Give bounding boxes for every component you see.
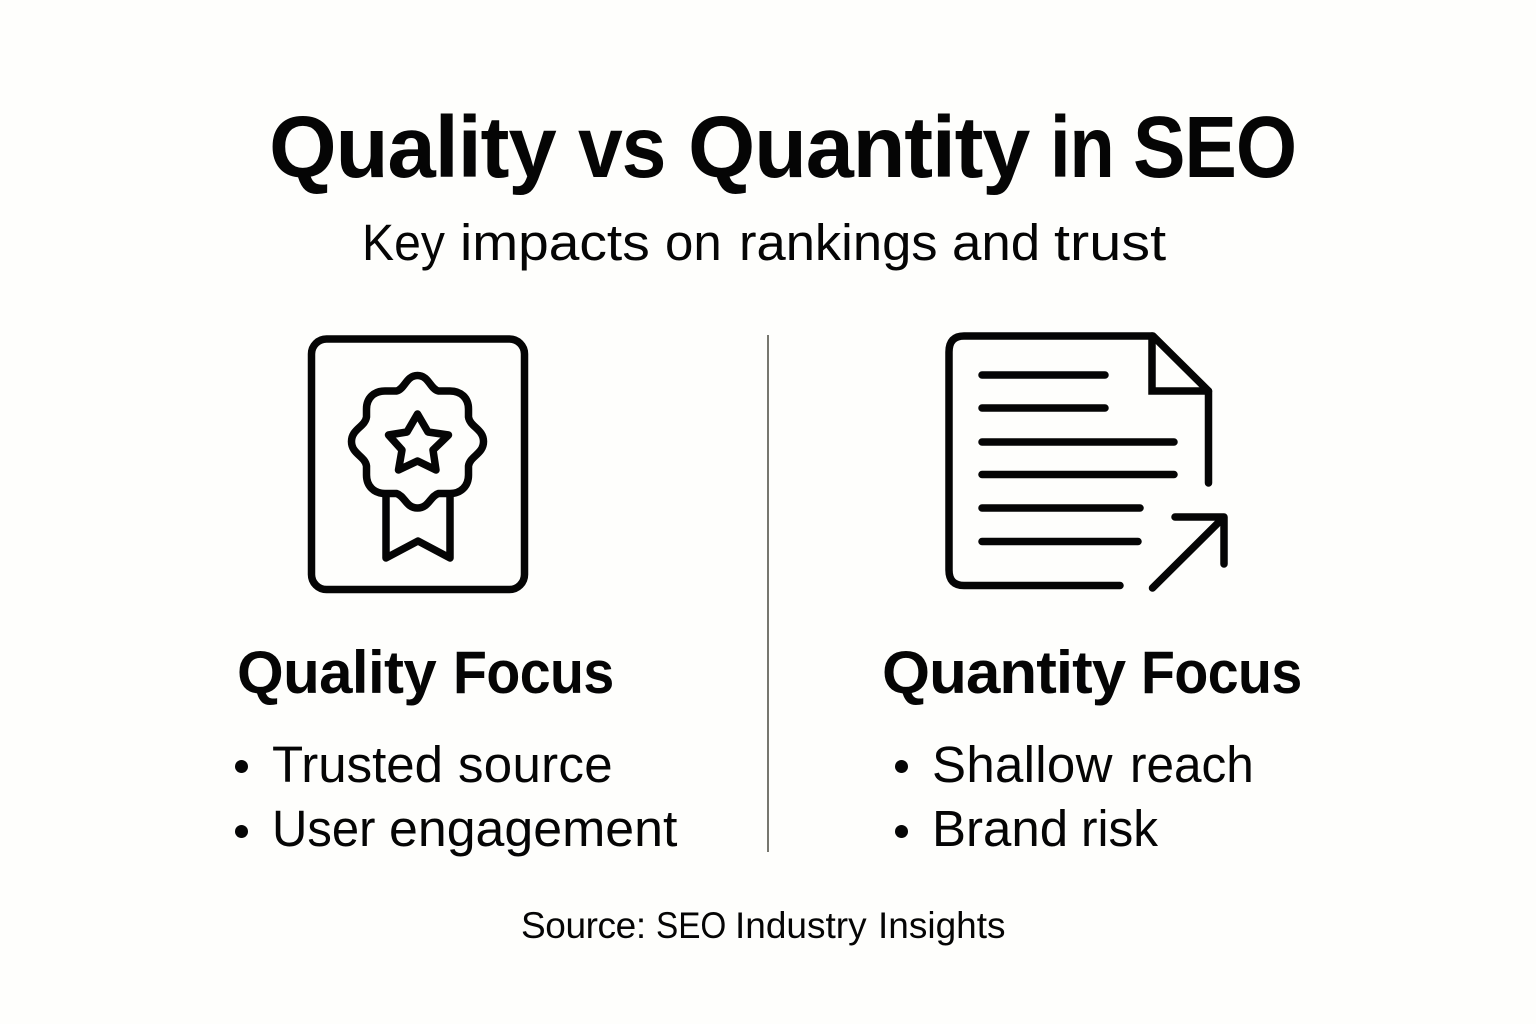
- subtitle: on: [665, 214, 722, 271]
- bullet list: quantity: [895, 736, 1254, 857]
- title: Quality: [269, 99, 556, 196]
- bullet list: quantity: reach: [1130, 736, 1254, 793]
- bullet list: quantity: Brand: [932, 800, 1068, 857]
- source note: Industry: [735, 905, 867, 946]
- source note: SEO: [656, 905, 726, 946]
- bullet list: quality: engagement: [389, 800, 677, 857]
- heading: quantity focus: Quantity: [882, 639, 1125, 706]
- subtitle: and: [952, 214, 1040, 271]
- title: Quantity: [688, 99, 1029, 196]
- title: SEO: [1133, 99, 1296, 196]
- subtitle: Key: [362, 214, 445, 271]
- subtitle: rankings: [739, 214, 938, 271]
- subtitle: impacts: [460, 214, 650, 271]
- source note: Insights: [878, 905, 1006, 946]
- heading: quality focus: Quality: [237, 639, 436, 706]
- bullet list: quality: source: [458, 736, 613, 793]
- heading: quality focus: Focus: [453, 639, 614, 706]
- bullet list: quantity: Shallow: [932, 736, 1113, 793]
- bullet list: quantity: risk: [1081, 800, 1158, 857]
- heading: quantity focus: [882, 639, 1302, 706]
- subtitle: [362, 214, 1166, 271]
- heading: quality focus: [237, 639, 614, 706]
- heading: quantity focus: Focus: [1141, 639, 1302, 706]
- title: [269, 99, 1296, 196]
- bullet list: quality: User: [272, 800, 375, 857]
- divider: [767, 335, 768, 852]
- title: in: [1050, 99, 1114, 196]
- title: vs: [578, 99, 665, 196]
- bullet list: quality: [235, 736, 678, 857]
- subtitle: trust: [1054, 214, 1166, 271]
- bullet list: quality: Trusted: [272, 736, 443, 793]
- source note: [521, 905, 1006, 946]
- source note: Source:: [521, 905, 646, 946]
